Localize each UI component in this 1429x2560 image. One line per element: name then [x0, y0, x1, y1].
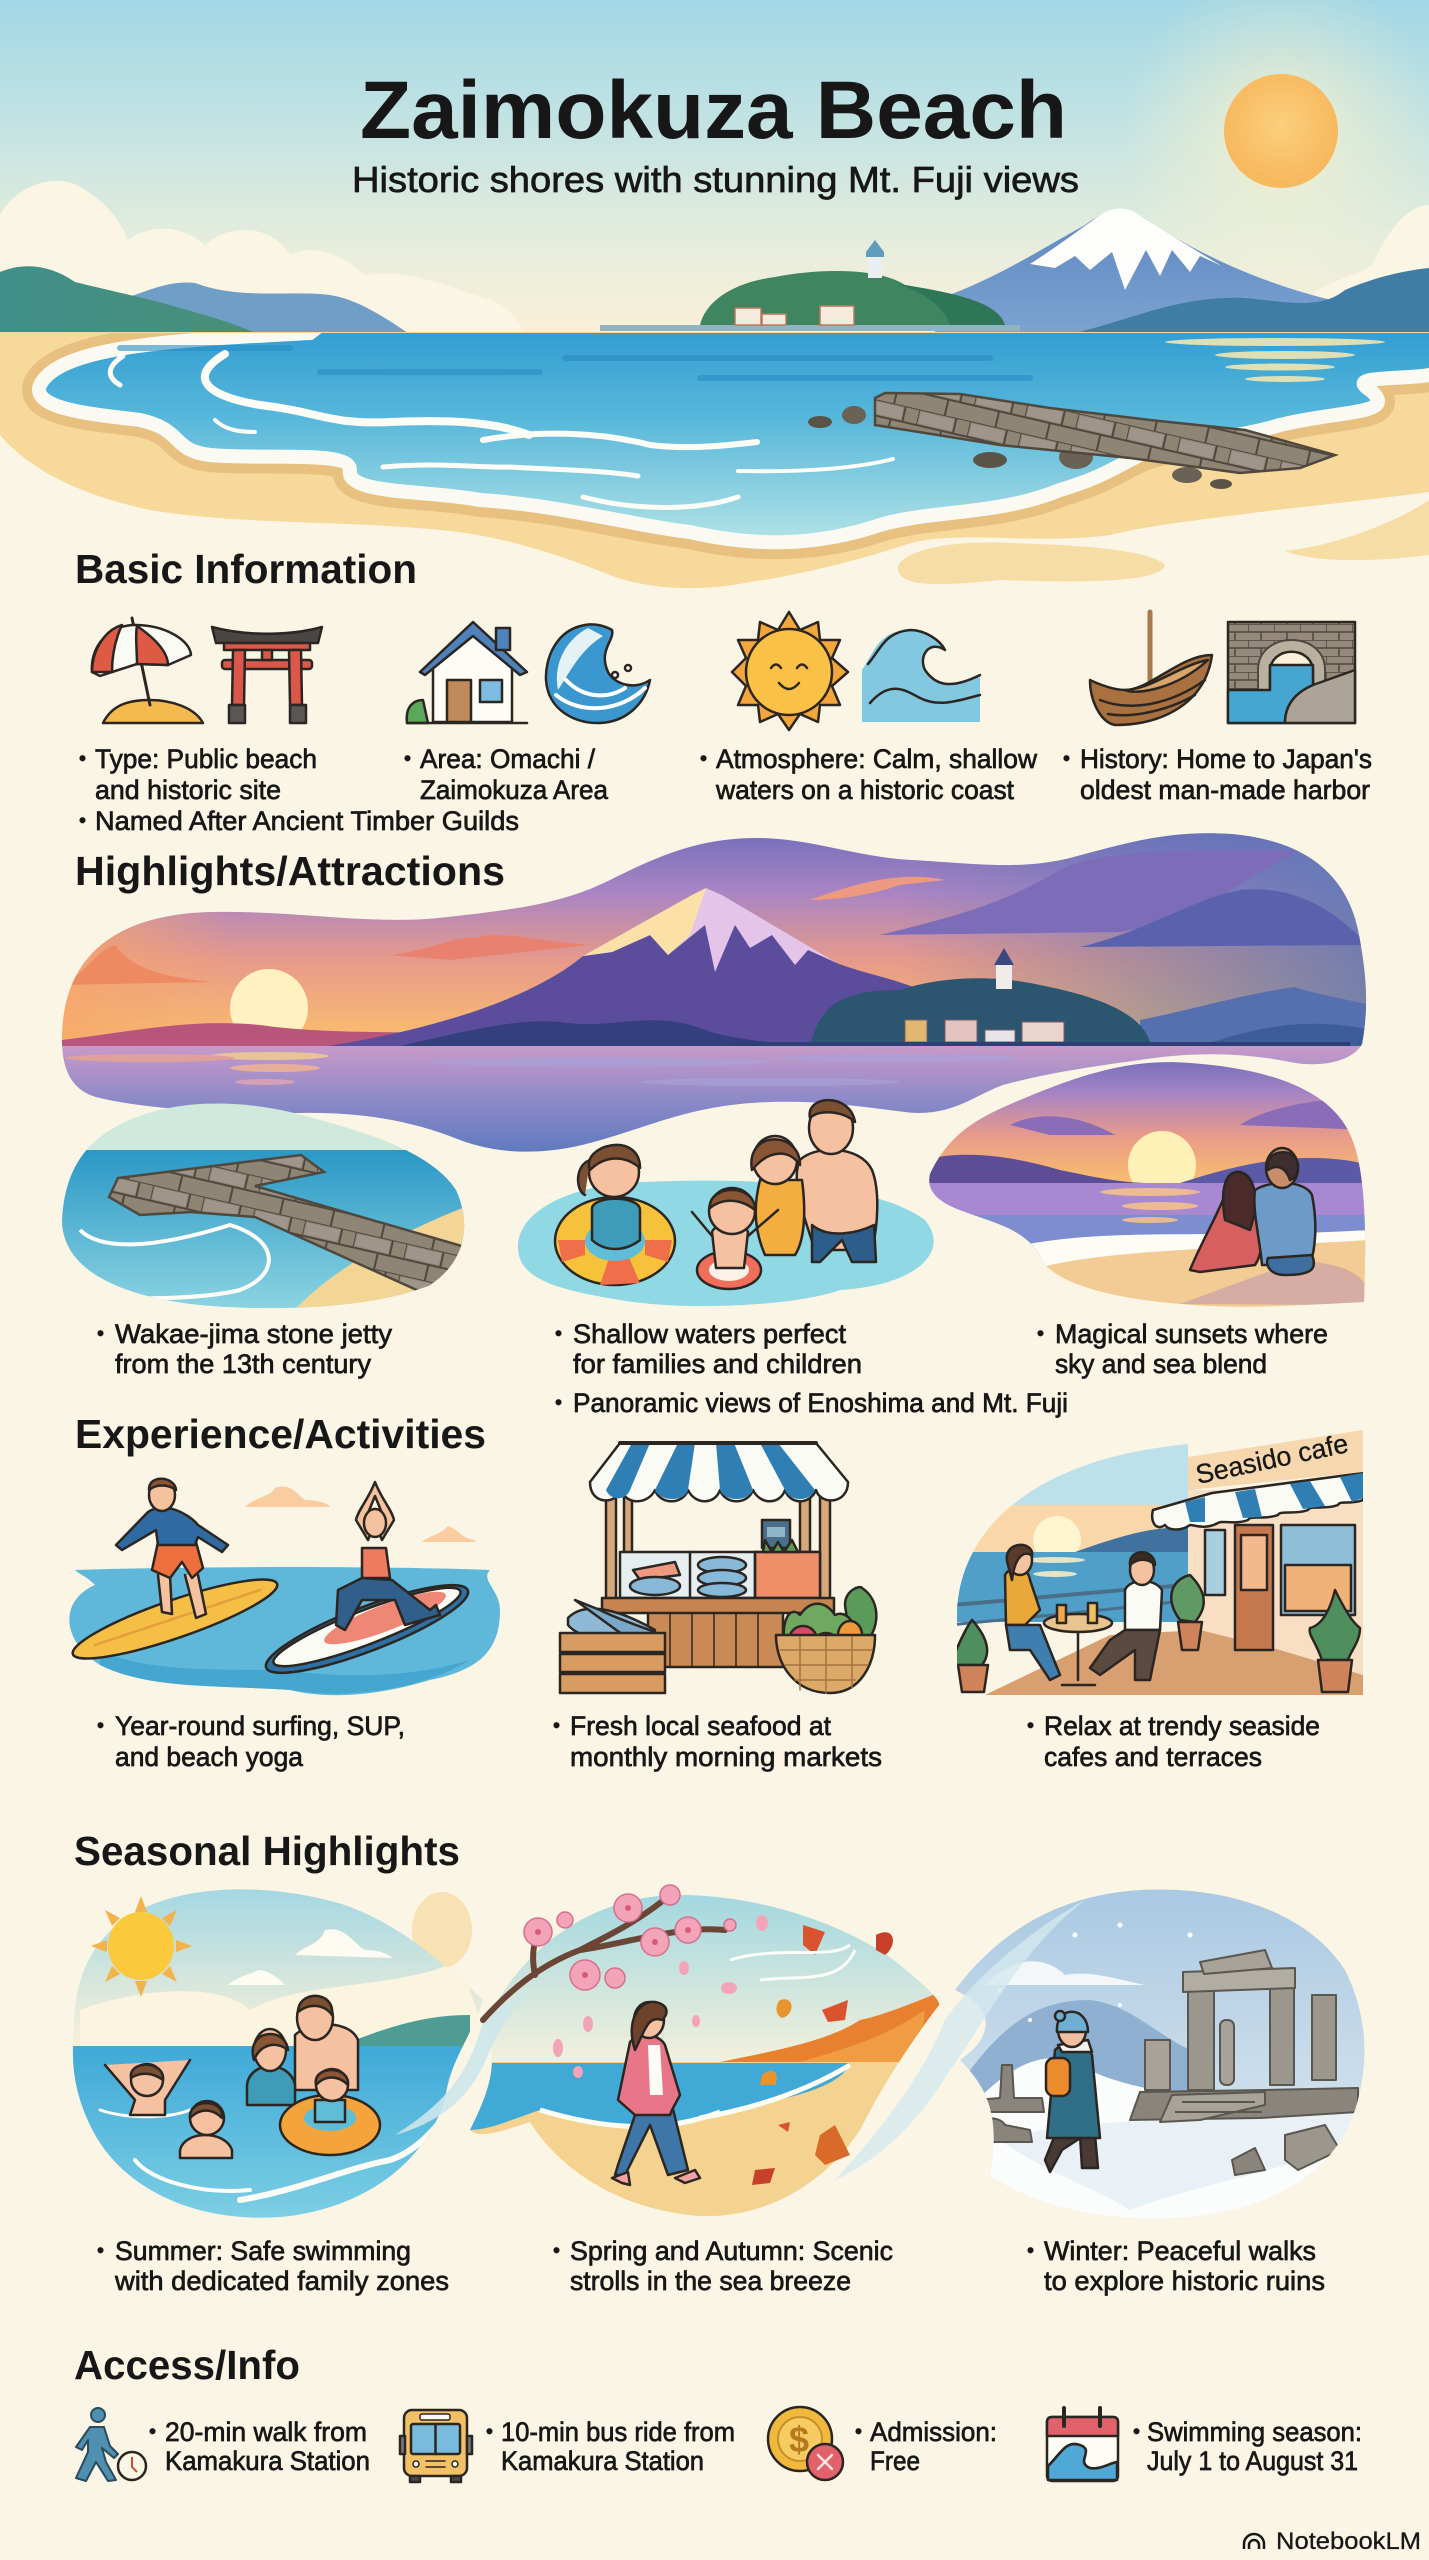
awning [1152, 1473, 1363, 1530]
text: highlights: • [555, 1323, 562, 1345]
yellow surfboard [67, 1566, 283, 1672]
illustration: couple at sunset [929, 1062, 1366, 1307]
text: basic information: • [404, 748, 411, 770]
sun with rays [91, 1896, 192, 1997]
text: access info: Free [870, 2446, 920, 2476]
icon: walking time [76, 2408, 146, 2481]
right mountains [1075, 268, 1429, 333]
heading: Experience/Activities: Experience/Activities [75, 1411, 486, 1457]
text: basic information: waters on a historic coast [715, 775, 1014, 805]
text: access info: Admission: [870, 2417, 997, 2447]
text: experience: cafes and terraces [1044, 1742, 1262, 1772]
customers and table [1005, 1545, 1162, 1685]
peach cloud [412, 1892, 472, 1968]
icon: house [407, 622, 527, 723]
clouds [245, 1486, 475, 1542]
icon: free admission coin: $ [789, 2419, 809, 2460]
icon: stone harbour arch [1228, 622, 1355, 723]
illustration: spring and autumn stroll [395, 1885, 950, 2222]
text: basic information: • [79, 748, 86, 770]
text: highlights: • [1037, 1323, 1044, 1345]
text: basic information: Type: Public beach [95, 744, 317, 774]
text: basic information: Area: Omachi / [420, 744, 595, 774]
icon: beach umbrella [92, 618, 203, 723]
text: highlights: Wakae-jima stone jetty [115, 1319, 392, 1349]
text: basic information: • [79, 810, 86, 832]
text: seasons: Winter: Peaceful walks [1044, 2236, 1316, 2266]
text: seasons: with dedicated family zones [114, 2266, 449, 2296]
clouds [62, 850, 1368, 985]
girl in swim ring [555, 1145, 675, 1285]
text: access info: • [855, 2421, 862, 2443]
cherry branch [483, 1885, 736, 2020]
text: access info [149, 2417, 1362, 2476]
father [797, 1100, 877, 1262]
Enoshima island [730, 948, 1350, 1047]
walking figure [1045, 2011, 1100, 2172]
illustration: family in shallow water [518, 1100, 934, 1306]
text: seasons [97, 2236, 1325, 2296]
mother [247, 2066, 295, 2105]
Mt. Fuji [935, 208, 1340, 333]
illustration: seaside cafe [950, 1428, 1368, 1695]
text: basic information: • [1063, 748, 1070, 770]
awning [590, 1443, 848, 1501]
far hills [62, 1023, 400, 1046]
heading: Access/Info: Access/Info [74, 2342, 300, 2388]
sea with reflection [50, 1046, 1380, 1161]
sun [1121, 0, 1429, 291]
panel: basic information icons [92, 612, 1355, 730]
deck [985, 1630, 1363, 1695]
ring child [280, 2095, 380, 2155]
illustration: morning market stall [560, 1443, 876, 1693]
sea [39, 310, 1429, 542]
text: basic information: Named After Ancient Timber Guilds [95, 806, 519, 836]
text: basic information: Atmosphere: Calm, shallow [716, 744, 1037, 774]
text: experience: • [1027, 1715, 1034, 1737]
sand patches [898, 500, 1429, 584]
icon: calm wave [862, 630, 980, 722]
text: access info: Swimming season: [1147, 2417, 1362, 2447]
Wakae-jima stone jetty [808, 393, 1335, 489]
text: access info: 20-min walk from [165, 2417, 367, 2447]
text: experience: • [97, 1715, 104, 1737]
text: highlights [97, 1319, 1328, 1418]
text: access info: July 1 to August 31 [1147, 2446, 1358, 2476]
text: seasons: strolls in the sea breeze [570, 2266, 851, 2296]
text: access info: Kamakura Station [501, 2446, 704, 2476]
text: basic information [79, 744, 1372, 836]
illustration: surfing and SUP yoga [67, 1479, 500, 1695]
heading: Seasonal Highlights: Seasonal Highlights [74, 1828, 460, 1874]
water [69, 1567, 500, 1695]
Enoshima island with lighthouse [600, 240, 1020, 331]
text: seasons: • [97, 2240, 104, 2262]
walking woman [612, 2002, 700, 2185]
text: experience: Relax at trendy seaside [1044, 1711, 1320, 1741]
couple [1190, 1148, 1315, 1275]
text: experience: monthly morning markets [570, 1742, 882, 1772]
text: highlights: for families and children [573, 1349, 862, 1379]
text: basic information: oldest man-made harbor [1080, 775, 1370, 805]
waving boy [105, 2060, 190, 2115]
yoga figure [336, 1482, 440, 1630]
potted plants [950, 1575, 1360, 1692]
icon: wooden boat [1090, 612, 1212, 725]
text: access info: 10-min bus ride from [501, 2417, 735, 2447]
text: access info: • [149, 2421, 156, 2443]
text: highlights: sky and sea blend [1055, 1349, 1267, 1379]
text: highlights: Shallow waters perfect [573, 1319, 846, 1349]
sign board: Seasido cafe [1193, 1428, 1351, 1490]
fish display [620, 1540, 820, 1598]
mother [751, 1136, 804, 1255]
heading: Highlights/Attractions: Highlights/Attractions [75, 848, 505, 894]
title: Zaimokuza Beach [360, 65, 1067, 156]
text: experience: Fresh local seafood at [570, 1711, 831, 1741]
icon: round wave [546, 624, 650, 723]
text: experience: and beach yoga [115, 1742, 304, 1772]
text: basic information: and historic site [95, 775, 281, 805]
icon: bus [400, 2410, 472, 2482]
icon: smiling sun [732, 612, 848, 730]
text: seasons: Spring and Autumn: Scenic [570, 2236, 893, 2266]
vegetable basket [776, 1587, 876, 1693]
text: highlights: from the 13th century [115, 1349, 371, 1379]
icon: torii gate [212, 627, 322, 723]
text: highlights: Magical sunsets where [1055, 1319, 1328, 1349]
illustration: Mt. Fuji sunset panorama [50, 825, 1380, 1161]
text: access info: • [1133, 2421, 1140, 2443]
text: highlights: • [555, 1392, 562, 1414]
surfer [116, 1479, 228, 1618]
text: basic information: History: Home to Japan's [1080, 744, 1372, 774]
illustration: Wakae-jima stone jetty [62, 1104, 464, 1308]
illustration: summer swimming [72, 1889, 483, 2218]
icon: swimming season calendar [1047, 2408, 1118, 2481]
text: seasons: to explore historic ruins [1044, 2266, 1325, 2296]
icon: free admission coin [768, 2407, 843, 2480]
sand [0, 332, 1429, 588]
text: seasons: Summer: Safe swimming [115, 2236, 411, 2266]
toddler with ring [692, 1188, 778, 1289]
near boy [180, 2135, 232, 2158]
hero beach scene [0, 0, 1429, 588]
text: highlights: Panoramic views of Enoshima and Mt. Fuji [573, 1388, 1068, 1418]
falling petals and leaves [553, 1915, 893, 2185]
illustration: winter ruins walk [835, 1885, 1375, 2225]
text: seasons: • [1027, 2240, 1034, 2262]
text: basic information: Zaimokuza Area [420, 775, 609, 805]
ruins [972, 1950, 1358, 2175]
clouds [0, 181, 1429, 333]
door and window [1205, 1525, 1355, 1650]
text: seasons: • [553, 2240, 560, 2262]
subtitle: Historic shores with stunning Mt. Fuji views [352, 159, 1079, 200]
text: access info: Kamakura Station [165, 2446, 370, 2476]
text: experience: • [553, 1715, 560, 1737]
text: access info: • [486, 2421, 493, 2443]
left mountains [0, 266, 408, 333]
right hills [1140, 987, 1370, 1046]
swimmers [105, 1996, 380, 2158]
text: highlights: • [97, 1323, 104, 1345]
wave swoosh [395, 1990, 530, 2135]
SUP board [258, 1570, 476, 1688]
counter [602, 1598, 834, 1667]
wave swoosh [835, 1900, 1085, 2180]
text: basic information: • [700, 748, 707, 770]
NotebookLM logo mark [1244, 2534, 1264, 2549]
price sign [762, 1520, 790, 1548]
heading: Basic Information: Basic Information [75, 546, 417, 592]
text: experience: Year-round surfing, SUP, [115, 1711, 405, 1741]
text: experience [97, 1711, 1320, 1772]
NotebookLM label: NotebookLM [1276, 2528, 1421, 2555]
Mt. Fuji [328, 888, 912, 1046]
fish crate [560, 1600, 665, 1693]
cafe wall [1188, 1490, 1363, 1675]
father [295, 2024, 358, 2090]
sun [230, 969, 308, 1030]
